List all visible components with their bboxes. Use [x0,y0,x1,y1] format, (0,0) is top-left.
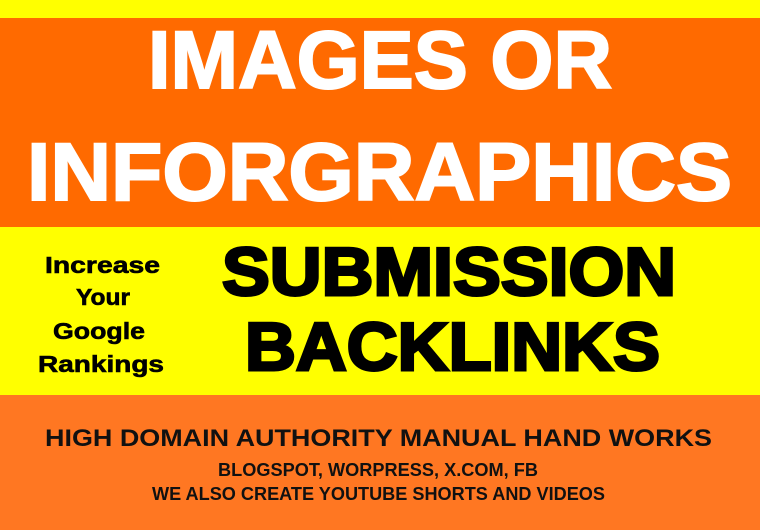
side text: increase rankings: Increase [45,252,160,278]
panel: title band [0,15,760,227]
bottom headline: HIGH DOMAIN AUTHORITY MANUAL HAND WORKS [45,425,712,452]
side text: increase rankings [38,252,164,377]
side text: increase rankings: Rankings [38,351,164,377]
side text: increase rankings: Your [76,284,130,310]
panel: middle yellow band [0,227,760,395]
heading: submission: SUBMISSION [222,234,676,310]
bottom line 2: BLOGSPOT, WORPRESS, X.COM, FB [218,460,538,480]
bottom line 3: WE ALSO CREATE YOUTUBE SHORTS AND VIDEOS [152,484,605,504]
title line 2: INFORGRAPHICS [27,127,732,218]
side text: increase rankings: Google [53,318,145,344]
panel: bottom band [0,395,760,530]
heading: backlinks: BACKLINKS [245,309,660,385]
title line 1: IMAGES OR [148,15,612,106]
